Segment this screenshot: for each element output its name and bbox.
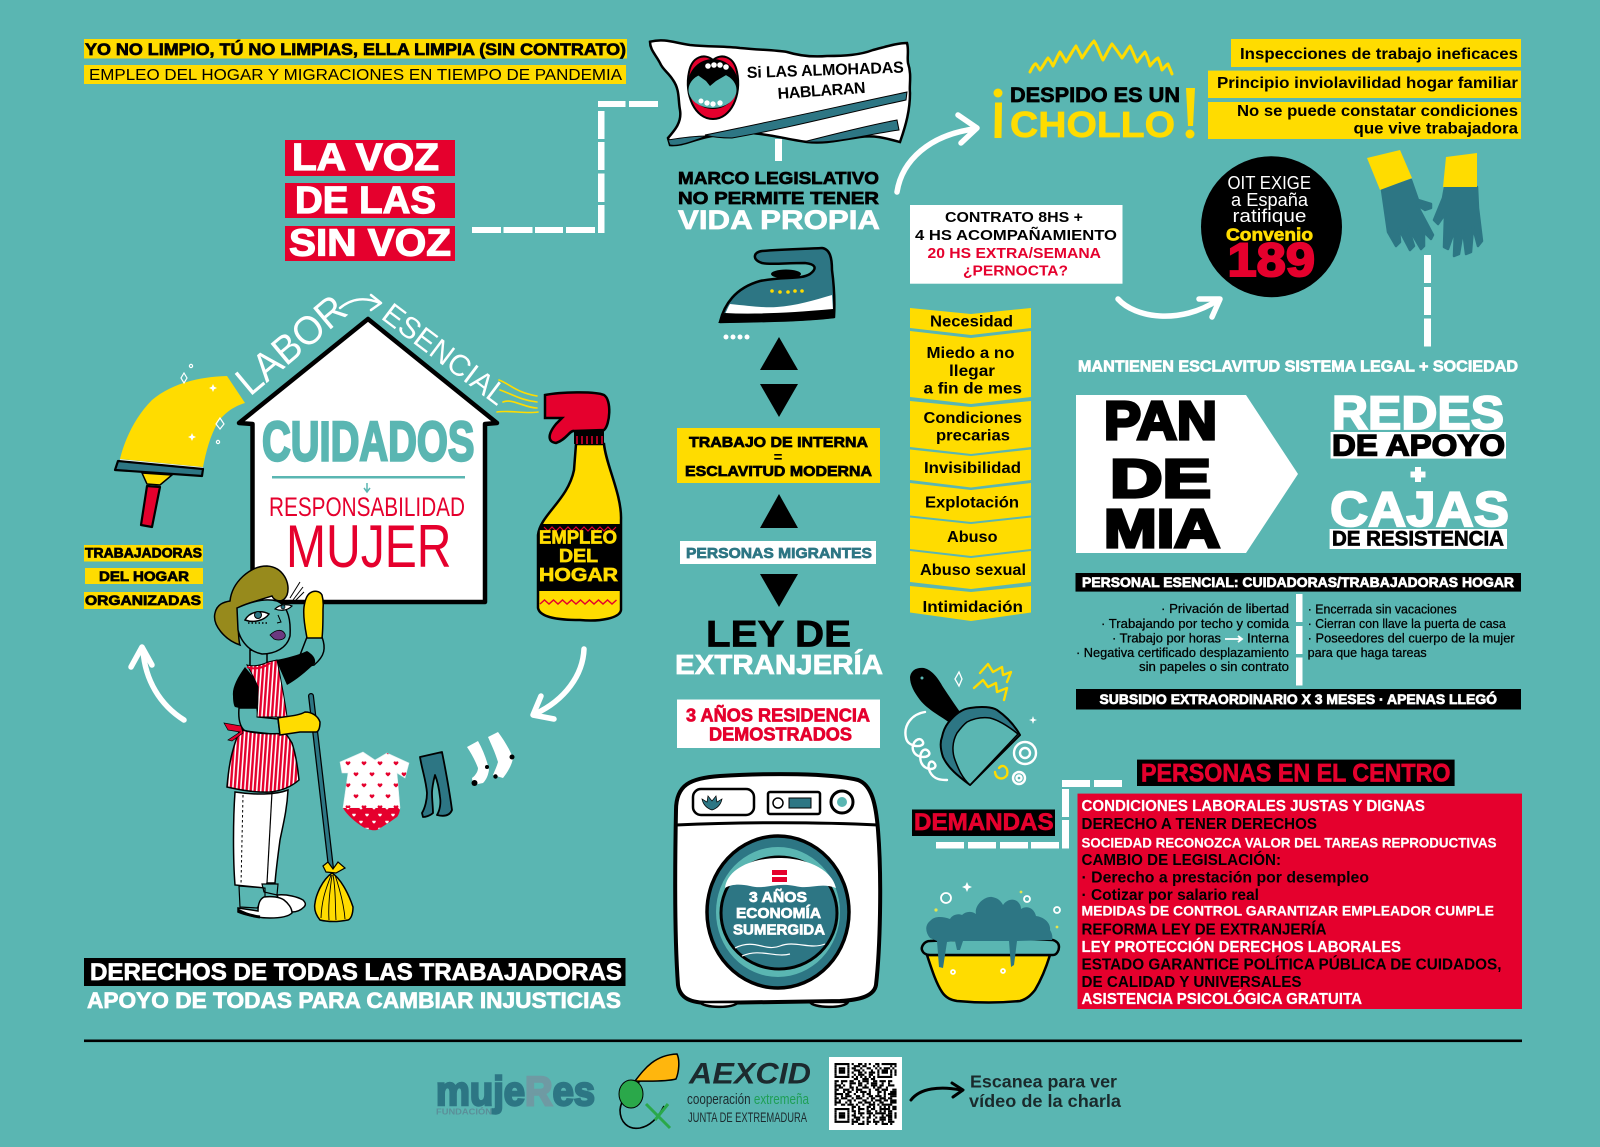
heading: la voz de las sin voz: LA VOZ [292,137,439,179]
sleeves [233,667,260,709]
label: demandas: DEMANDAS [914,809,1054,836]
face [237,600,290,654]
text block: marco legislativo: VIDA PROPIA [678,205,880,235]
text block: marco legislativo [678,168,880,235]
heading: ley de extranjeria: LEY DE [706,614,851,654]
circle callout: convenio 189: Convenio [1226,224,1313,244]
collar [247,663,270,668]
text: mantienen esclavitud: MANTIENEN ESCLAVITUD SISTEMA LEGAL + SOCIEDAD [1078,358,1518,376]
logo: aexcid: JUNTA DE EXTREMADURA [688,1109,807,1125]
heading: ley de extranjeria: EXTRANJERÍA [675,649,883,680]
text: mujer: MUJER [286,513,452,580]
icon: pillow with mouth [650,40,910,145]
list: right column: · Encerrada sin vacaciones [1308,602,1457,616]
bottle label text: DEL [559,546,598,566]
callout: trabajo de interna [677,428,880,483]
list: chevron conditions: Explotación [925,495,1019,512]
heading: despido es un chollo: CHOLLO [1010,104,1175,145]
apron bib [247,660,287,717]
list: left column: · Trabajando por techo y comida [1101,617,1289,631]
plus sign [1410,467,1426,482]
callout: trabajo de interna: = [774,449,783,466]
heading: la voz de las sin voz: SIN VOZ [289,222,451,264]
list: left column [1076,602,1289,674]
panel: personal esencial [1076,573,1521,710]
list: left column: · Negativa certificado desplazamiento [1076,646,1289,660]
title block [84,39,627,84]
washer text: 3 AÑOS [749,888,807,906]
arrow: triangles up and down [760,337,798,417]
arrow: curved right down [533,649,584,719]
shoes [277,895,305,912]
text block: derechos [84,958,626,1013]
panel: personal esencial: SUBSIDIO EXTRAORDINARIO X 3 MESES · APENAS LLEGÓ [1100,690,1497,707]
equals sign [772,870,787,882]
callout: inspecciones: que vive trabajadora [1354,121,1518,138]
bottle label text: EMPLEO [539,528,617,548]
heading: cuidados: CUIDADOS [262,410,474,472]
arrow panel: pandemia [1076,391,1298,559]
list: chevron conditions: Abuso [947,529,998,546]
heading: redes de apoyo: DE APOYO [1332,430,1505,463]
illustration: woman [215,566,353,922]
list: chevron conditions: a fin de mes [924,380,1022,398]
heading: cajas de resistencia: CAJAS [1330,483,1509,537]
panel: demandas list: · Derecho a prestación por desempleo [1082,870,1369,887]
arrow: to oit circle [1118,299,1220,317]
list: left column: · Trabajo por horas [1112,632,1221,646]
label: labor esencial: LABOR [228,287,355,404]
icon: iron [720,248,834,340]
text block: derechos: DERECHOS DE TODAS LAS TRABAJADORAS [90,959,622,986]
dashed connector to pillow [472,101,658,233]
bottle label text: HOGAR [539,565,618,585]
neck [250,650,267,668]
panel: demandas list: MEDIDAS DE CONTROL GARANTIZAR EMPLEADOR CUMPLE [1082,902,1494,918]
logo: fundacion mujeres: FUNDACIÓN [436,1108,492,1116]
text: responsabilidad: RESPONSABILIDAD [269,492,465,522]
panel: demandas list: DERECHO A TENER DERECHOS [1082,816,1317,833]
lashes [290,582,304,601]
callout: 3 años residencia [677,700,880,748]
panel: demandas list: · Cotizar por salario real [1082,887,1259,904]
heading: redes de apoyo: REDES [1332,386,1504,439]
list: chevron conditions: Miedo a no [926,345,1014,362]
icon: baby clothes [340,752,409,830]
list: left column: Interna [1247,632,1289,646]
list: right column [1308,602,1515,660]
callout: trabajo de interna: TRABAJO DE INTERNA [689,434,868,451]
list: chevron conditions [910,308,1031,621]
arrow panel: pandemia: DE [1110,449,1211,509]
text block: marco legislativo: MARCO LEGISLATIVO [678,168,879,188]
list: chevron conditions: Invisibilidad [924,460,1021,477]
callout: contrato: ¿PERNOCTA? [963,264,1068,280]
callout: inspecciones: Principio inviolavilidad hogar familiar [1217,75,1518,92]
logo: fundacion mujeres: mujeRes [436,1068,595,1114]
heading: la voz de las sin voz: DE LAS [295,180,436,222]
bow [224,723,243,741]
squeegee icon [115,364,245,527]
arrow: triangle down [760,574,798,607]
callout: inspecciones [1208,39,1521,139]
apron skirt [227,729,299,792]
mop [311,696,331,868]
pillow text: Si LAS ALMOHADAS [747,60,904,82]
icon: mouth [688,56,738,119]
arrow panel: pandemia: MIA [1104,499,1220,559]
list: right column: · Cierran con llave la puerta de casa [1308,617,1506,631]
heading: redes de apoyo [1331,386,1506,463]
text: escanea [969,1072,1121,1111]
callout: 3 años residencia: DEMOSTRADOS [709,724,852,744]
label: trabajadoras del hogar organizadas [84,545,203,609]
panel: demandas list: ESTADO GARANTICE POLÍTICA PÚBLICA DE CUIDADOS, [1082,955,1502,973]
dashed connector: demandas to personas [936,780,1122,848]
arrow: triangle up [760,494,798,528]
list: chevron conditions: Intimidación [922,599,1023,616]
washer text: SUMERGIDA [733,922,825,938]
text block: derechos: APOYO DE TODAS PARA CAMBIAR INJUSTICIAS [87,988,621,1013]
legs [239,884,278,908]
panel: personal esencial: PERSONAL ESENCIAL: CUIDADORAS/TRABAJADORAS HOGAR [1082,574,1514,590]
list: chevron conditions: Abuso sexual [920,562,1026,579]
callout: inspecciones: No se puede constatar condiciones [1237,103,1518,120]
arrow: to qr caption [911,1083,963,1100]
bottle label text [539,528,618,585]
arm lower [239,708,280,735]
spray lines [497,380,538,413]
circle callout: convenio 189: 189 [1228,233,1315,286]
label: labor esencial: ESENCIAL [376,297,513,412]
arrow: to despido [897,115,977,192]
panel: demandas list [1078,794,1522,1009]
callout: personas migrantes [680,541,876,564]
panel: demandas list: SOCIEDAD RECONOZCA VALOR DEL TAREAS REPRODUCTIVAS [1082,834,1496,850]
arrow: curved left up [131,647,184,720]
washer text: ECONOMÍA [736,905,821,922]
heading: despido es un chollo: DESPIDO ES UN [1010,84,1180,107]
text: escanea: vídeo de la charla [969,1091,1121,1111]
circle callout: convenio 189 [1201,156,1342,297]
icon: socks [467,732,514,786]
panel: demandas list: CAMBIO DE LEGISLACIÓN: [1082,851,1281,869]
logo: aexcid: AEXCID [688,1058,811,1090]
list: chevron conditions: llegar [949,363,995,380]
qr code [829,1057,902,1130]
panel: demandas list: LEY PROTECCIÓN DERECHOS LABORALES [1082,938,1401,956]
label: labor esencial [228,287,513,412]
panel: demandas list: REFORMA LEY DE EXTRANJERÍA [1082,922,1326,938]
subtitle: EMPLEO DEL HOGAR Y MIGRACIONES EN TIEMPO DE PANDEMIA [89,67,622,84]
callout: contrato: CONTRATO 8HS + [945,210,1083,226]
callout: contrato [910,205,1122,284]
circle callout: convenio 189: a España [1231,190,1309,210]
callout: contrato: 4 HS ACOMPAÑAMIENTO [915,226,1117,244]
icon: tights [420,752,452,817]
list: left column: · Privación de libertad [1161,602,1289,616]
callout: trabajo de interna: ESCLAVITUD MODERNA [685,463,872,480]
logo: aexcid [619,1054,811,1128]
heading: despido es un chollo [994,84,1195,145]
label: trabajadoras del hogar organizadas: DEL HOGAR [99,569,189,584]
text block: marco legislativo: NO PERMITE TENER [678,188,879,208]
washer text [733,888,825,938]
list: chevron conditions: Necesidad [930,314,1013,330]
icon: dustpan [905,664,1037,785]
list: right column: · Poseedores del cuerpo de la mujer [1308,632,1515,646]
list: chevron conditions: precarias [936,428,1010,444]
icon: rubber gloves [1367,150,1482,256]
eyes [245,605,292,623]
heading: personas en el centro: PERSONAS EN EL CENTRO [1141,760,1450,788]
callout: 3 años residencia: 3 AÑOS RESIDENCIA [686,704,870,726]
icon: wash basin with foam [922,882,1060,1002]
title: YO NO LIMPIO, TÚ NO LIMPIAS, ELLA LIMPIA (SIN CONTRATO) [85,40,626,59]
panel: demandas list: ASISTENCIA PSICOLÓGICA GRATUITA [1082,990,1362,1008]
decoration: yellow zigzag [1030,41,1172,74]
callout: inspecciones: Inspecciones de trabajo ineficaces [1240,46,1518,63]
list: right column: para que haga tareas [1308,646,1427,660]
arm raised [295,637,324,668]
pillow text [747,60,904,103]
heading: la voz de las sin voz [285,137,455,264]
glove on mop [278,712,320,735]
heading: cajas de resistencia: DE RESISTENCIA [1332,528,1504,550]
icon: spray bottle [538,392,621,621]
house panel: cuidados [239,319,497,602]
text: escanea: Escanea para ver [970,1072,1117,1092]
list: left column: sin papeles o sin contrato [1139,660,1289,674]
circle callout: convenio 189: OIT EXIGE [1228,173,1311,193]
callout: personas migrantes: PERSONAS MIGRANTES [686,545,872,562]
panel: demandas list: DE CALIDAD Y UNIVERSALES [1082,974,1302,991]
label: trabajadoras del hogar organizadas: TRABAJADORAS [85,546,202,560]
heading: ley de extranjeria [675,614,883,680]
label: trabajadoras del hogar organizadas: ORGANIZADAS [85,593,201,608]
panel: demandas list: CONDICIONES LABORALES JUSTAS Y DIGNAS [1082,798,1425,815]
pillow text: HABLARAN [777,80,866,103]
logo: aexcid: cooperación extremeña [687,1091,810,1108]
dashed connector below gloves [1424,255,1431,346]
connector tick under pillow [775,139,782,161]
arrow panel: pandemia: PAN [1104,391,1217,451]
icon: washing machine [675,774,880,1007]
callout: contrato: 20 HS EXTRA/SEMANA [928,246,1102,262]
pants [234,790,288,888]
lips [270,630,285,640]
hair back [215,566,288,645]
list: chevron conditions: Condiciones [924,410,1022,427]
circle callout: convenio 189: ratifique [1232,206,1306,226]
